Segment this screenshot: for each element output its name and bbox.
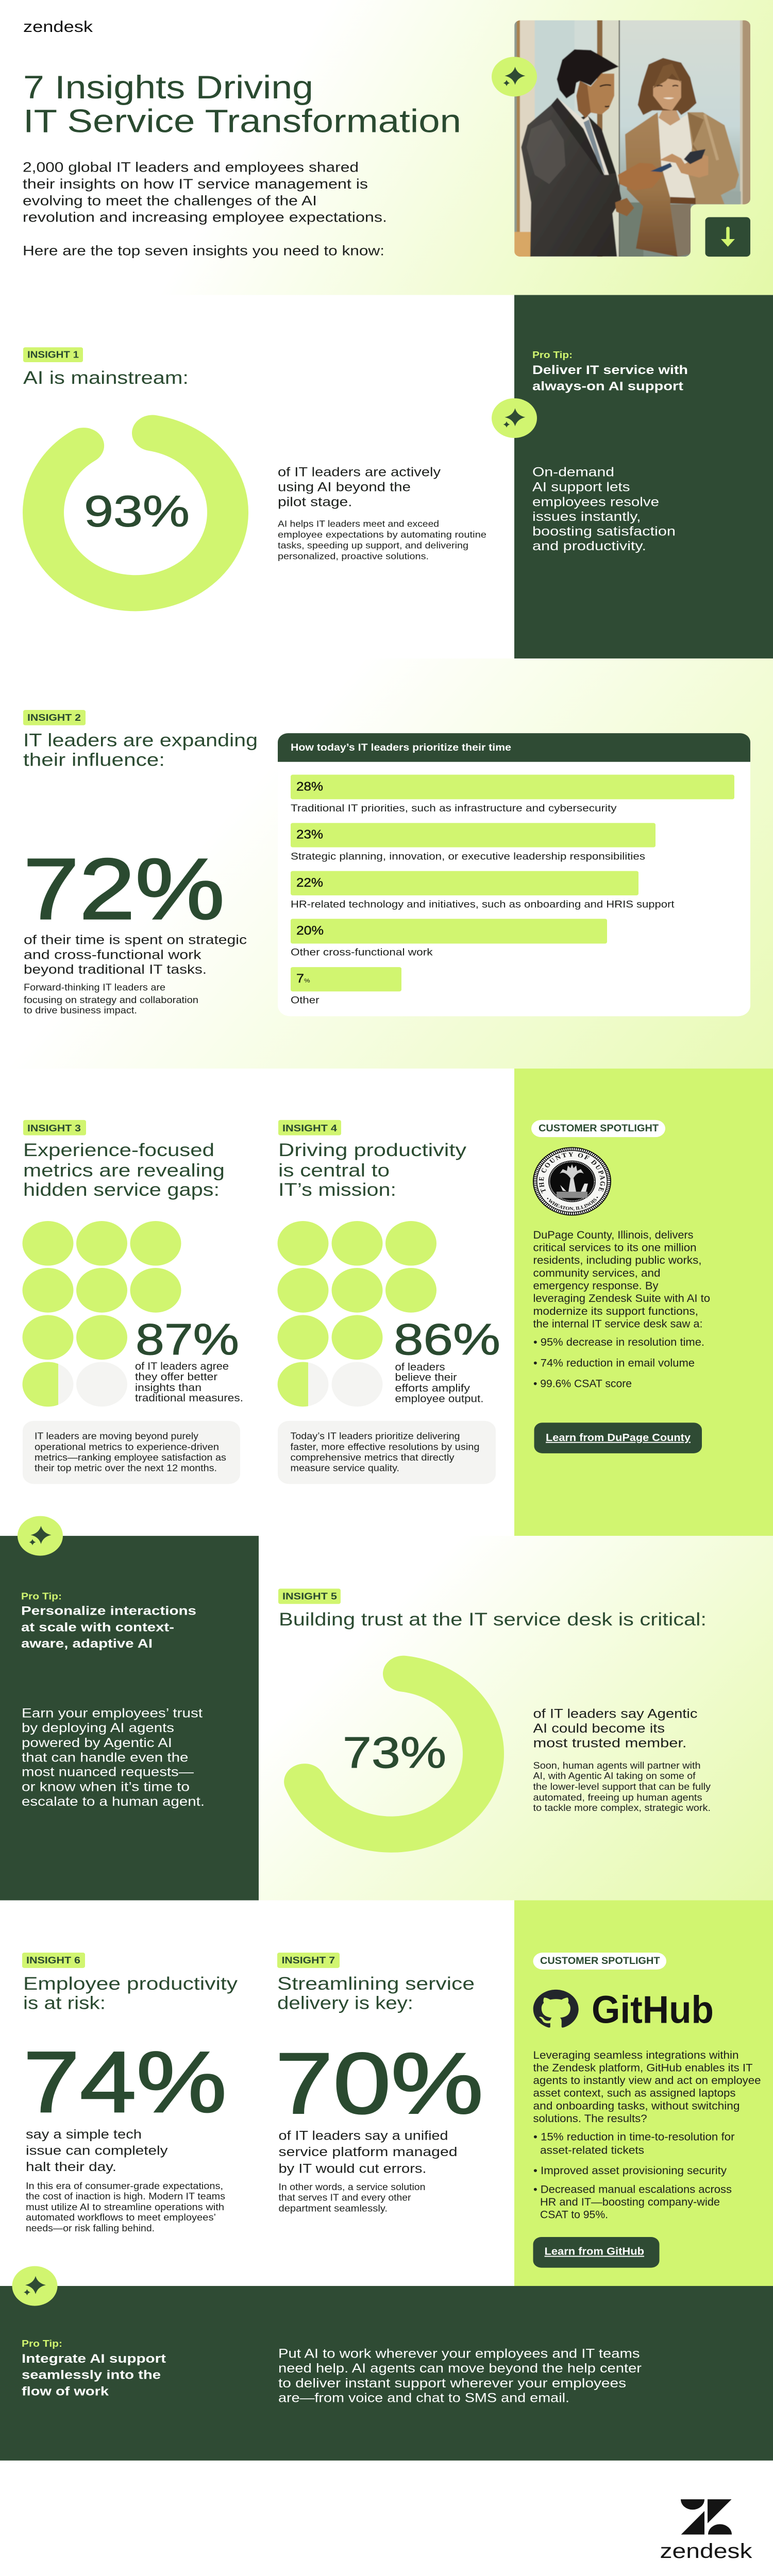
text: supporting detail: AI, with Agentic AI taking on some of (533, 1771, 696, 1782)
text: supporting detail (278, 519, 486, 561)
panel: pro tip personalize (0, 1516, 259, 1900)
text: supporting detail: to tackle more complex, strategic work. (533, 1803, 711, 1814)
text: DuPage County story: community services, and (533, 1267, 660, 1279)
bar: 7 percent: % (304, 977, 310, 984)
callout: insight 4 detail: faster, more effective resolutions by using (290, 1442, 479, 1452)
button: learn from DuPage County: Learn from DuPage County (546, 1431, 691, 1443)
heading: insight 7: delivery is key: (277, 1993, 413, 2013)
text: stat description: pilot stage. (278, 495, 352, 509)
label: pro tip: Pro Tip: (21, 1591, 62, 1602)
bar: 7 percent (291, 967, 401, 1006)
tag: insight 3 (23, 1120, 86, 1136)
text: supporting detail: needs—or risk falling behind. (26, 2223, 155, 2234)
list: GitHub results: HR and IT—boosting company-wide (540, 2196, 720, 2208)
tag: insight 1: INSIGHT 1 (27, 349, 79, 360)
text: DuPage County story: leveraging Zendesk Suite with AI to (533, 1293, 710, 1304)
chart: 73 percent ring: 73% (343, 1728, 446, 1777)
text: DuPage County story: residents, including public works, (533, 1255, 701, 1266)
text: stat description: employee output. (395, 1393, 483, 1404)
callout: insight 4 detail: Today’s IT leaders prioritize delivering (290, 1431, 460, 1442)
stat: 72 percent: 72% (23, 841, 225, 938)
chart: 73 percent ring (305, 1674, 483, 1835)
text: stat description (24, 933, 247, 976)
callout: insight 4 detail (278, 1421, 496, 1484)
text: pro tip body: issues instantly, (532, 510, 641, 524)
panel: pro tip always-on AI (492, 295, 773, 658)
text: stat description: believe their (395, 1371, 457, 1383)
tag: insight 2 (23, 710, 86, 725)
logo: County of DuPage seal (533, 1147, 611, 1216)
text: pro tip body: escalate to a human agent. (22, 1794, 205, 1809)
tag: insight 5 (278, 1589, 341, 1604)
list: GitHub results: asset-related tickets (540, 2144, 644, 2156)
text: stat description: of IT leaders agree (135, 1360, 229, 1372)
tag: customer spotlight (533, 1953, 666, 1970)
heading: pro tip: Personalize interactions (21, 1604, 196, 1618)
intro text: Here are the top seven insights you need to know: (23, 243, 384, 259)
header: chart title (278, 733, 750, 762)
text: supporting detail: Forward-thinking IT leaders are (24, 982, 165, 993)
bar: 22 percent: HR-related technology and initiatives, such as onboarding and HRIS support (291, 899, 675, 910)
heading: pro tip: Integrate AI support (22, 2352, 166, 2365)
bar: 28 percent: Traditional IT priorities, such as infrastructure and cybersecurity (291, 803, 617, 814)
logo: zendesk footer: zendesk (660, 2540, 752, 2563)
callout: insight 3 detail: IT leaders are moving beyond purely (35, 1431, 198, 1442)
list: GitHub results: • Improved asset provisioning security (533, 2164, 727, 2177)
heading: pro tip (532, 363, 688, 393)
text: GitHub story: solutions. The results? (533, 2112, 647, 2124)
bar: 22 percent (291, 871, 675, 910)
label: pro tip: Pro Tip: (532, 350, 573, 361)
text: stat description: traditional measures. (135, 1392, 243, 1404)
text: pro tip body: by deploying AI agents (22, 1721, 174, 1735)
text: supporting detail: In this era of consumer-grade expectations, (26, 2181, 223, 2191)
text: stat description: of their time is spent on strategic (24, 933, 247, 947)
text: DuPage County story: the internal IT service desk saw a: (533, 1318, 702, 1330)
text: pro tip body (22, 1706, 205, 1809)
tag: insight 1 (23, 347, 83, 362)
text: stat description (395, 1361, 483, 1404)
text: stat description: and cross-functional work (24, 947, 201, 962)
icon: down arrow tile (705, 217, 750, 257)
text: supporting detail: tasks, speeding up support, and delivering (278, 540, 468, 550)
text: pro tip body: or know when it’s time to (22, 1780, 190, 1794)
bar: 7 percent: 7 (296, 972, 304, 985)
text: pro tip body: are—from voice and chat to SMS and email. (278, 2391, 569, 2405)
heading: insight 3 (23, 1140, 225, 1199)
heading: insight 3: metrics are revealing (23, 1160, 225, 1180)
text: pro tip body: On-demand (532, 465, 614, 479)
text: pro tip body (532, 465, 676, 553)
heading: insight 6 (23, 1973, 238, 2013)
logo: zendesk footer (660, 2499, 752, 2563)
callout: insight 3 detail: their top metric over the next 12 months. (35, 1463, 217, 1473)
bar: 20 percent (291, 919, 607, 958)
text: DuPage County story: DuPage County, Illinois, delivers (533, 1229, 693, 1241)
heading: pro tip: always-on AI support (532, 380, 684, 393)
text: stat description: beyond traditional IT tasks. (24, 962, 207, 976)
bar: 23 percent: 23% (296, 828, 323, 841)
stat: 86 percent: 86% (394, 1315, 500, 1364)
heading: pro tip: aware, adaptive AI (21, 1637, 153, 1651)
chart: 93 percent ring: 93% (84, 487, 190, 536)
bar: 7 percent: Other (291, 995, 320, 1006)
stat: 87 percent: 87% (136, 1315, 239, 1364)
heading: pro tip (21, 1604, 196, 1651)
stat: 74 percent: 74% (23, 2034, 227, 2130)
heading: insight 7 (277, 1973, 475, 2013)
text: pro tip body: Earn your employees’ trust (22, 1706, 203, 1720)
text: stat description: by IT would cut errors. (278, 2161, 426, 2176)
panel: insight 6 (22, 1953, 238, 2234)
text: stat description: most trusted member. (533, 1736, 686, 1750)
panel: insight 3 (23, 1120, 243, 1484)
button: learn from GitHub: Learn from GitHub (544, 2245, 644, 2257)
list: DuPage results: • 74% reduction in email volume (533, 1357, 695, 1369)
section: insight 2 (0, 658, 773, 1069)
text: supporting detail: personalized, proactive solutions. (278, 551, 429, 561)
icon: sparkle badge hero (492, 57, 537, 96)
button: learn from DuPage County (534, 1422, 702, 1453)
text: GitHub story: the Zendesk platform, GitHub enables its IT (533, 2062, 753, 2074)
callout: insight 3 detail (23, 1421, 240, 1484)
intro text (23, 160, 387, 259)
panel: insight 7 (275, 1953, 483, 2214)
text: supporting detail: In other words, a service solution (278, 2182, 425, 2193)
heading: pro tip: at scale with context- (21, 1621, 174, 1634)
panel: customer spotlight GitHub (514, 1900, 773, 2286)
tag: insight 3: INSIGHT 3 (27, 1123, 81, 1133)
button: learn from GitHub (533, 2237, 660, 2268)
heading: insight 6: is at risk: (23, 1993, 106, 2013)
tag: customer spotlight: CUSTOMER SPOTLIGHT (540, 1955, 660, 1967)
text: supporting detail (26, 2181, 225, 2234)
stat: 70 percent: 70% (275, 2036, 483, 2132)
text: pro tip body: AI support lets (532, 480, 630, 494)
text: supporting detail: the lower-level support that can be fully (533, 1782, 711, 1792)
heading: insight 2: their influence: (23, 750, 165, 770)
text: GitHub story (533, 2049, 761, 2124)
list: GitHub results: • 15% reduction in time-to-resolution for (533, 2131, 735, 2143)
text: supporting detail: Soon, human agents will partner with (533, 1760, 700, 1771)
logo: County of DuPage seal: • WHEATON, ILLINOIS • (547, 1196, 598, 1211)
callout: insight 3 detail: metrics—ranking employee satisfaction as (35, 1452, 226, 1463)
bar: 20 percent: Other cross-functional work (291, 947, 433, 958)
icon: sparkle badge (492, 398, 537, 438)
heading: insight 4: is central to (278, 1160, 390, 1180)
title: IT Service Transformation (23, 104, 461, 139)
text: stat description (135, 1360, 243, 1404)
tag: insight 7: INSIGHT 7 (281, 1955, 335, 1966)
logo: zendesk wordmark: zendesk (23, 18, 93, 36)
text: stat description: say a simple tech (26, 2127, 142, 2141)
title: 7 Insights Driving (23, 70, 313, 106)
text: supporting detail: the cost of inaction is high. Modern IT teams (26, 2191, 225, 2202)
callout: insight 4 detail: comprehensive metrics that directly (290, 1452, 455, 1463)
text: supporting detail (24, 982, 198, 1016)
text: DuPage County story: critical services to its one million (533, 1242, 696, 1253)
text: stat description: they offer better (135, 1370, 217, 1383)
chart: 87 percent dot grid (23, 1221, 181, 1406)
callout: insight 3 detail: operational metrics to experience-driven (35, 1442, 219, 1452)
panel: pro tip integrate (0, 2266, 773, 2461)
text: GitHub story: asset context, such as assigned laptops (533, 2087, 735, 2099)
text: supporting detail: automated workflows to meet employees’ (26, 2212, 216, 2223)
panel: bar chart card (278, 733, 750, 1016)
text: pro tip body: powered by Agentic AI (22, 1735, 172, 1750)
list: DuPage results: • 99.6% CSAT score (533, 1378, 632, 1389)
text: supporting detail: focusing on strategy and collaboration (24, 995, 198, 1006)
text: stat description: of IT leaders say a unified (278, 2128, 448, 2143)
tag: insight 4: INSIGHT 4 (282, 1123, 337, 1133)
list: GitHub results: CSAT to 95%. (540, 2209, 608, 2221)
icon: sparkle badge (12, 2266, 58, 2306)
heading: insight 2: IT leaders are expanding (23, 730, 258, 750)
text: supporting detail: automated, freeing up human agents (533, 1792, 702, 1803)
heading: pro tip: Deliver IT service with (532, 363, 688, 377)
text: pro tip body: most nuanced requests— (22, 1765, 194, 1779)
bar: 20 percent: 20% (296, 924, 324, 938)
heading: pro tip: flow of work (22, 2385, 109, 2398)
heading: insight 4 (278, 1140, 466, 1199)
text: stat description (26, 2127, 168, 2174)
text: stat description: using AI beyond the (278, 480, 411, 494)
heading: insight 4: IT’s mission: (278, 1179, 396, 1199)
text: DuPage County story: emergency response. By (533, 1280, 659, 1292)
tag: insight 4 (278, 1120, 341, 1136)
list: DuPage results (533, 1336, 704, 1389)
text: pro tip body: that can handle even the (22, 1750, 188, 1765)
bar: 28 percent: 28% (296, 780, 323, 793)
text: pro tip body: need help. AI agents can move beyond the help center (278, 2361, 642, 2376)
section: hero background (0, 0, 773, 295)
text: stat description: service platform managed (278, 2145, 457, 2159)
text: stat description: of leaders (395, 1361, 445, 1372)
text: pro tip body: to deliver instant support wherever your employees (278, 2376, 626, 2391)
list: GitHub results (533, 2131, 735, 2221)
panel: insight 4 (277, 1120, 500, 1484)
text: supporting detail: department seamlessly. (278, 2204, 388, 2214)
section: insight 5 background (259, 1536, 773, 1900)
bar: 22 percent: 22% (296, 876, 323, 890)
tag: customer spotlight (531, 1120, 665, 1137)
text: supporting detail: must utilize AI to streamline operations with (26, 2202, 224, 2213)
label: pro tip: Pro Tip: (22, 2338, 62, 2349)
heading: pro tip (22, 2352, 166, 2398)
icon: sparkle badge (18, 1516, 63, 1556)
tag: customer spotlight: CUSTOMER SPOTLIGHT (539, 1123, 659, 1134)
text: stat description: issue can completely (26, 2143, 168, 2158)
intro text: their insights on how IT service management is (23, 177, 368, 192)
tag: insight 6: INSIGHT 6 (26, 1955, 80, 1966)
text: GitHub story: Leveraging seamless integrations within (533, 2049, 738, 2061)
text: supporting detail (278, 2182, 425, 2214)
heading: insight 3: Experience-focused (23, 1140, 214, 1160)
heading: insight 2 (23, 730, 258, 770)
list: DuPage results: • 95% decrease in resolution time. (533, 1336, 704, 1348)
text: pro tip body: boosting satisfaction (532, 524, 676, 538)
heading: insight 3: hidden service gaps: (23, 1179, 220, 1199)
intro text: evolving to meet the challenges of the AI (23, 193, 317, 209)
tag: insight 6 (22, 1953, 85, 1968)
text: stat description: efforts amplify (395, 1382, 470, 1394)
heading: insight 7: Streamlining service (277, 1973, 475, 1993)
text: supporting detail: AI helps IT leaders meet and exceed (278, 519, 439, 529)
text: supporting detail: to drive business impact. (24, 1005, 137, 1016)
text: stat description: AI could become its (533, 1721, 665, 1735)
text: stat description: of IT leaders are actively (278, 465, 441, 479)
text: pro tip body: and productivity. (532, 539, 646, 553)
text: pro tip body: Put AI to work wherever your employees and IT teams (278, 2346, 640, 2361)
heading: insight 5: Building trust at the IT service desk is critical: (279, 1609, 707, 1629)
list: GitHub results: • Decreased manual escalations across (533, 2183, 732, 2195)
panel: customer spotlight DuPage County (514, 1069, 773, 1536)
text: stat description (278, 465, 441, 509)
bar: 23 percent: Strategic planning, innovation, or executive leadership responsibilities (291, 851, 645, 862)
text: GitHub story: and onboarding tasks, without switching (533, 2100, 740, 2112)
bar: 28 percent (291, 775, 734, 814)
text: pro tip body (278, 2346, 642, 2405)
text: supporting detail: employee expectations by automating routine (278, 530, 486, 539)
text: stat description: insights than (135, 1381, 201, 1394)
logo: County of DuPage seal: THE COUNTY OF DUPAGE (539, 1152, 605, 1193)
tag: insight 5: INSIGHT 5 (282, 1591, 337, 1602)
photo: two colleagues looking at phones by a window (514, 19, 751, 258)
tag: insight 2: INSIGHT 2 (27, 713, 81, 723)
chart: 86 percent dot grid (277, 1221, 436, 1406)
text: pro tip body: employees resolve (532, 495, 659, 509)
title (23, 70, 461, 139)
text: DuPage County story: modernize its support functions, (533, 1305, 698, 1317)
text: stat description: halt their day. (26, 2159, 116, 2174)
text: supporting detail: that serves IT and every other (278, 2193, 411, 2203)
tag: insight 7 (277, 1953, 340, 1968)
header: chart title: How today’s IT leaders prioritize their time (291, 742, 511, 753)
intro text: revolution and increasing employee expectations. (23, 210, 387, 225)
text: GitHub story: agents to instantly view and act on employee (533, 2074, 761, 2086)
heading: insight 6: Employee productivity (23, 1973, 238, 1993)
text: stat description: of IT leaders say Agentic (533, 1706, 697, 1721)
chart: 93 percent ring (43, 433, 228, 593)
heading: insight 1: AI is mainstream: (23, 367, 189, 388)
text: DuPage County story (533, 1229, 710, 1330)
logo: GitHub: GitHub (592, 1989, 714, 2031)
logo: GitHub (533, 1989, 714, 2031)
text: supporting detail (533, 1760, 711, 1814)
heading: insight 4: Driving productivity (278, 1140, 466, 1160)
callout: insight 4 detail: measure service quality. (290, 1463, 399, 1473)
bar: 23 percent (291, 823, 656, 862)
panel: insight 5 (278, 1589, 711, 1835)
heading: pro tip: seamlessly into the (22, 2368, 161, 2382)
panel: insight 1 (23, 347, 486, 593)
intro text: 2,000 global IT leaders and employees shared (23, 160, 359, 175)
text: stat description (278, 2128, 457, 2176)
text: stat description (533, 1706, 697, 1750)
